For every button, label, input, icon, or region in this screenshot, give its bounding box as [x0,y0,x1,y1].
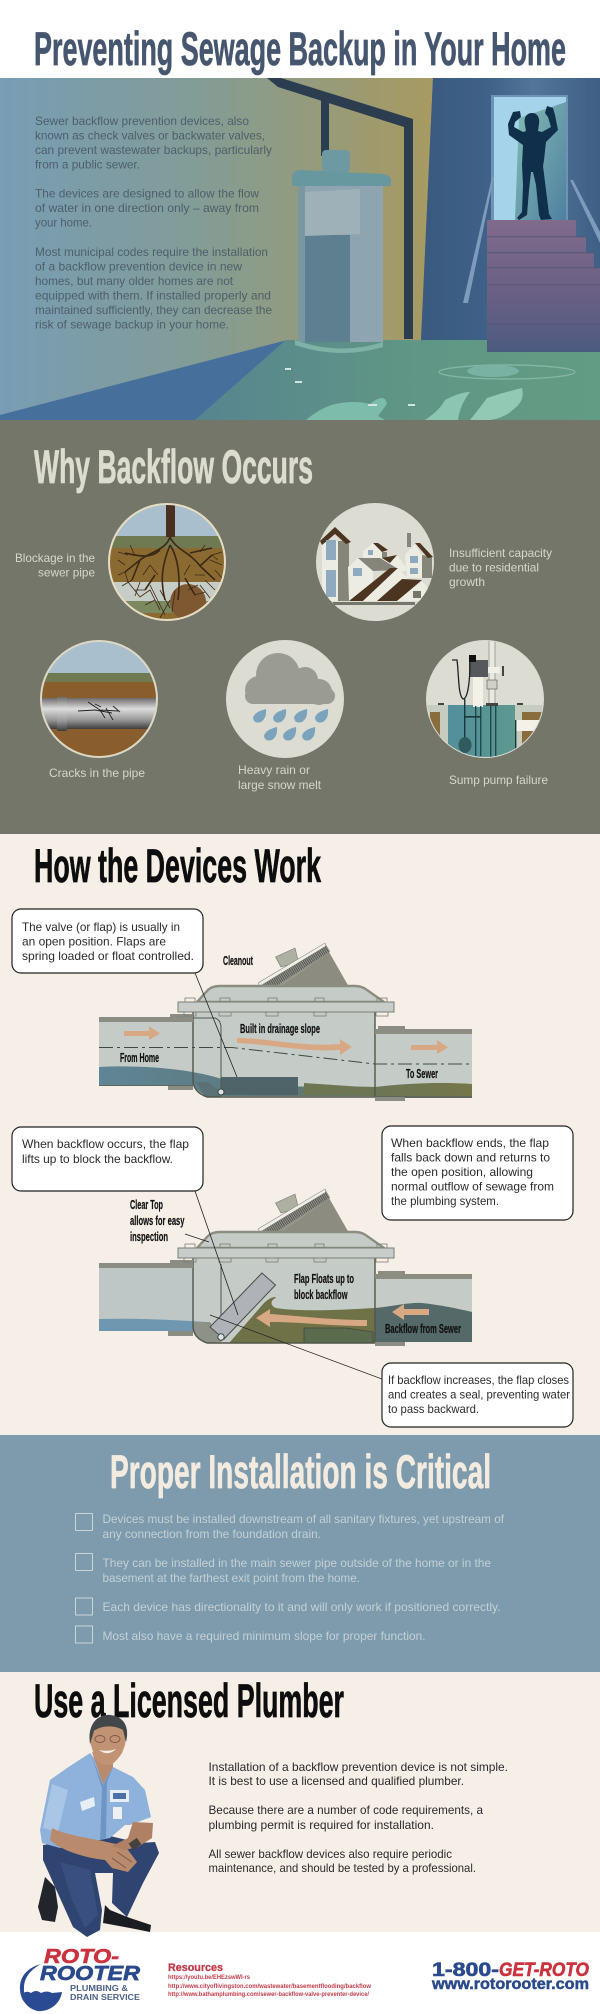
icon: person silhouette [508,106,558,220]
text block: intro: known as check valves or backwater valves, [35,128,265,142]
callout: backflow increases [382,1363,573,1427]
checklist item 1: Devices must be installed downstream of all sanitary fixtures, yet upstream of [102,1512,505,1526]
text block: intro [35,114,272,332]
icon: floor puddles [285,365,575,420]
arrow: to sewer [411,1040,448,1054]
label: Insufficient capacity [449,546,552,560]
callout: backflow ends: normal outflow of sewage from [391,1180,554,1194]
forearms and hands [50,1828,137,1872]
contact: phone and website: www.rotorooter.com [431,1976,589,1993]
checklist item 1: any connection from the foundation drain. [102,1527,321,1541]
label: to sewer: To Sewer [406,1066,438,1081]
text block: plumber advice: plumbing permit is required for installation. [208,1818,434,1832]
icon: backwater valve tank [292,150,391,353]
panel: licensed plumber [0,1672,600,1937]
leader line [195,1191,238,1315]
checklist item 1 [76,1512,505,1541]
callout: open position: spring loaded or float controlled. [22,949,194,963]
resources [168,1962,371,1998]
label [15,551,95,580]
label: cleanout: Cleanout [223,953,253,968]
heading: Why Backflow Occurs [34,440,313,493]
checklist item 4: Most also have a required minimum slope for proper function. [102,1629,426,1643]
heading: Use a Licensed Plumber [34,1674,344,1727]
label [238,763,322,792]
label: from home: From Home [120,1050,159,1065]
leader line [195,973,237,1077]
diagram: normal flow valve [99,943,472,1101]
checklist item 3: Each device has directionality to it and will only work if positioned correctly. [102,1600,501,1614]
callout: backflow occurs: lifts up to block the backflow. [22,1152,173,1166]
diagram: backflow valve [99,1189,472,1346]
logo: Roto-Rooter: DRAIN SERVICE [70,1993,141,2002]
icon: rain cloud [226,640,344,758]
panel: basement hero [0,78,600,420]
label [449,546,552,589]
text block: intro: The devices are designed to allow the flow [35,186,259,200]
contact: phone and website: GET-ROTO [499,1960,589,1981]
label: Sump pump failure [449,773,548,787]
text block: intro: risk of sewage backup in your home. [35,318,229,332]
icon: residential growth houses [316,503,434,621]
callout: backflow increases: If backflow increases, the flap closes [388,1373,569,1387]
leader line [210,1315,382,1379]
checklist item 2 [76,1554,491,1585]
label: clear top: inspection [130,1229,168,1244]
checklist item 2: They can be installed in the main sewer pipe outside of the home or in the [102,1556,491,1570]
callout: backflow ends: When backflow ends, the flap [391,1136,549,1150]
logo: Roto-Rooter: PLUMBING & [70,1984,128,1993]
text block: intro: maintained sufficiently, they can decrease the [35,303,272,317]
text block: plumber advice: It is best to use a licensed and qualified plumber. [208,1774,464,1788]
label: flap floats: block backflow [294,1287,348,1302]
text block: intro: your home. [35,216,92,230]
resources: https://youtu.be/EHEzswWI-rs [168,1975,251,1981]
arrow: backflow in pipe [392,1304,429,1320]
text block: plumber advice: Installation of a backflow prevention device is not simple. [208,1760,508,1774]
callout: backflow increases: and creates a seal, preventing water [388,1388,570,1402]
trousers [43,1836,159,1937]
icon: stairs [487,220,600,352]
resources: http://www.cityoflivingston.com/wastewater/basementflooding/backflow [168,1984,371,1990]
label: Cracks in the pipe [49,766,145,780]
logo: Roto-Rooter: ROOTER [40,1963,141,1985]
text block: plumber advice [208,1760,508,1875]
badges [80,1797,95,1811]
label: clear top: allows for easy [130,1213,185,1228]
callout: backflow ends: the open position, allowing [391,1165,533,1179]
text block: intro: of a backflow prevention device in new [35,260,242,274]
panel: proper installation [0,1435,600,1672]
neck [92,1752,113,1784]
arrow: backflow in body [256,1309,367,1327]
resources: Resources [168,1962,223,1974]
arrow: drainage slope [237,1038,352,1055]
panel: why backflow occurs [0,420,600,834]
text block: plumber advice: All sewer backflow devices also require periodic [208,1847,452,1861]
icon: sump pump [425,640,550,761]
callout: backflow increases: to pass backward. [388,1402,479,1416]
head [90,1720,127,1765]
icon: doorway [463,95,600,303]
text block: intro: Most municipal codes require the installation [35,245,268,259]
label: large snow melt [238,778,322,792]
text block: intro: Sewer backflow prevention devices, also [35,114,249,128]
icon: flap [210,1273,276,1339]
callout: backflow ends: the plumbing system. [391,1194,499,1208]
text block: plumber advice: Because there are a number of code requirements, a [208,1803,483,1817]
icon: overhead pipe [267,78,413,339]
label: growth [449,575,485,589]
label: flap floats [294,1271,354,1302]
label: sewer pipe [38,566,95,580]
label: clear top: Clear Top [130,1197,163,1212]
callout: backflow ends: falls back down and returns to [391,1150,550,1164]
text block: plumber advice: maintenance, and should be tested by a professional. [208,1861,476,1875]
callout: backflow occurs [12,1127,203,1191]
text block: intro: of water in one direction only – away from [35,201,259,215]
shirt [40,1753,151,1848]
label: due to residential [449,560,539,574]
icon: cracked pipe [38,638,160,761]
label: drainage slope: Built in drainage slope [240,1021,320,1036]
label: flap floats: Flap Floats up to [294,1271,354,1286]
logo: Roto-Rooter [20,1946,141,2011]
checklist item 2: basement at the farthest exit point from the home. [102,1571,360,1585]
logo: Roto-Rooter: ROTO- [44,1946,119,1968]
panel: footer [20,1946,589,2011]
callout: open position [12,909,203,973]
resources: http://www.bathamplumbing.com/sewer-backflow-valve-preventer-device/ [168,1992,369,1998]
text block: intro: from a public sewer. [35,158,140,172]
label: clear top [130,1197,185,1244]
label: Blockage in the [15,551,95,565]
callout: open position: The valve (or flap) is usually in [22,920,180,934]
label: backflow from sewer: Backflow from Sewer [385,1321,461,1336]
contact: phone and website [431,1960,589,1993]
arrow: from home [124,1026,160,1040]
panel: how the devices work [0,834,600,1435]
icon: tree roots blockage [105,500,230,623]
icon: cleanout cap [258,943,349,993]
icon: plumber photo [38,1715,159,1937]
contact: phone and website: 1-800- [432,1960,499,1981]
callout: backflow ends [382,1126,573,1220]
text block: intro: homes, but many older homes are not [35,274,234,288]
text block: intro: equipped with them. If installed properly and [35,288,271,302]
text block: intro: can prevent wastewater backups, particularly [35,143,272,157]
callout: backflow occurs: When backflow occurs, the flap [22,1137,189,1151]
label: Heavy rain or [238,763,310,777]
front shoe [103,1905,151,1932]
back shoe [38,1877,58,1922]
heading: How the Devices Work [34,839,321,892]
icon: cleanout cap [258,1189,349,1239]
callout: open position: an open position. Flaps are [22,934,166,948]
